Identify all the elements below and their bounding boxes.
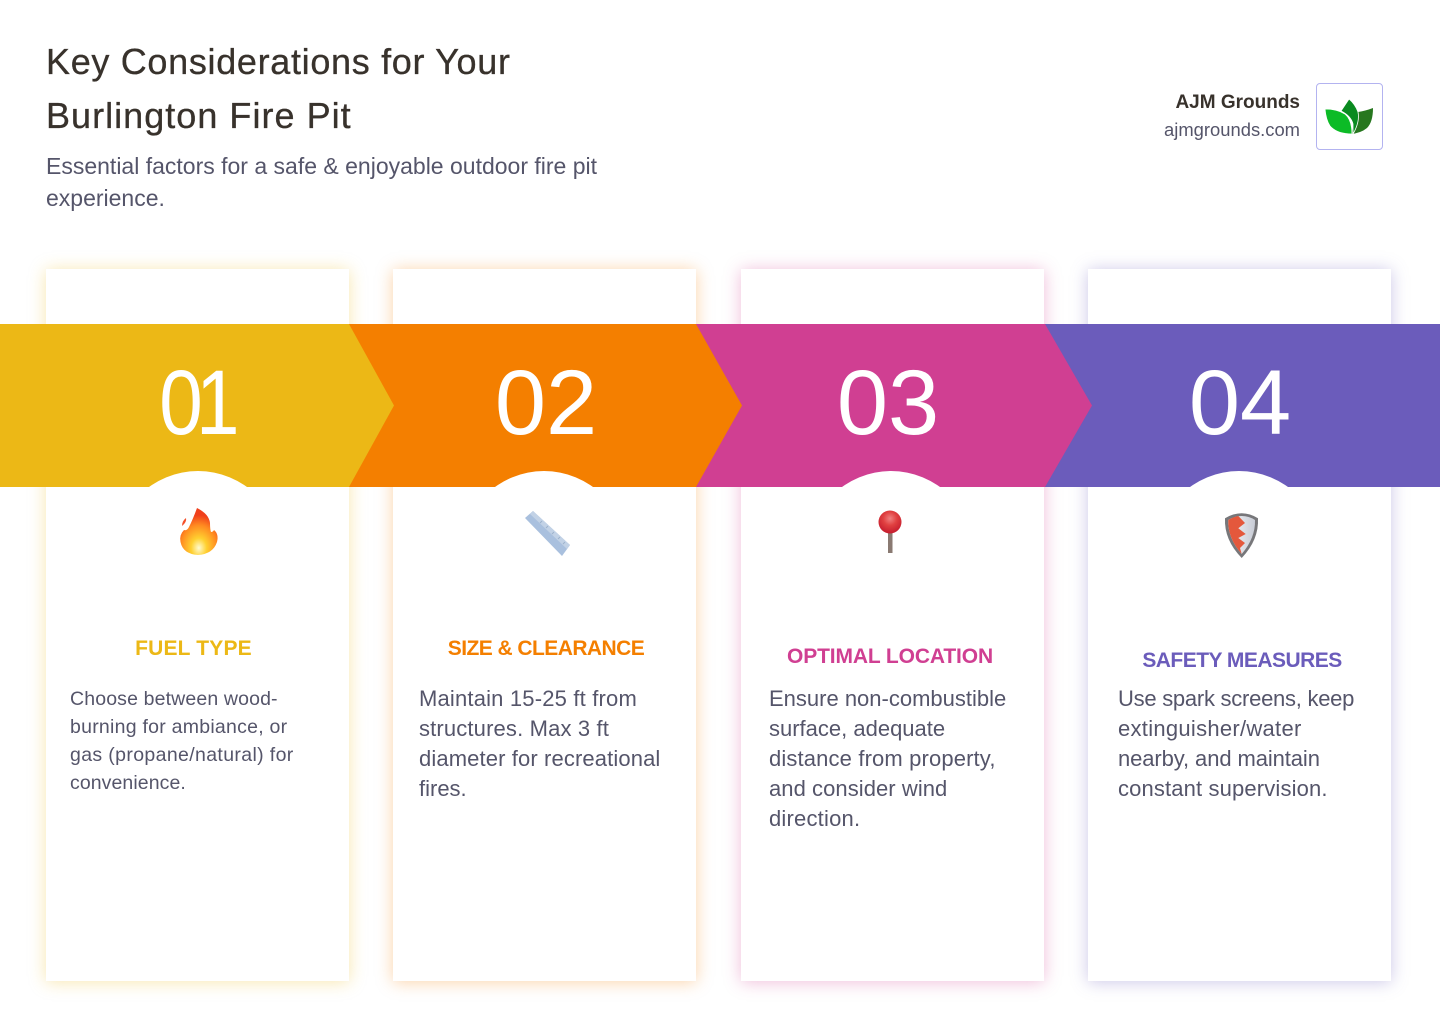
- text: fuel type: Choose between wood-: [70, 688, 278, 710]
- card 4: [1088, 269, 1391, 981]
- logo box: [1316, 83, 1383, 150]
- icon: pin: [878, 510, 902, 553]
- text: safety measures: extinguisher/water: [1118, 716, 1302, 741]
- text: optimal location: [769, 686, 1006, 831]
- text: size and clearance: structures. Max 3 ft: [419, 716, 609, 741]
- text: size and clearance: fires.: [419, 776, 467, 801]
- chevron band: [0, 324, 1440, 487]
- heading: fuel type: FUEL TYPE: [135, 637, 252, 660]
- text: optimal location: direction.: [769, 806, 860, 831]
- icon: leaves: [1326, 100, 1373, 134]
- card 1: [46, 269, 349, 981]
- chevron 3: [696, 324, 1092, 487]
- card 3: [741, 269, 1044, 981]
- title: Key Considerations for Your: [46, 41, 511, 82]
- icon: shield: [1225, 513, 1258, 558]
- brand name: AJM Grounds: [1175, 92, 1300, 113]
- chevron 2: [349, 324, 742, 487]
- text: fuel type: [70, 688, 294, 794]
- title: [46, 41, 511, 136]
- text: fuel type: gas (propane/natural) for: [70, 744, 294, 766]
- chevron 1: [0, 324, 394, 487]
- icon: fire: [180, 508, 218, 555]
- number 01: 01: [159, 352, 233, 454]
- heading: safety measures: SAFETY MEASURES: [1142, 649, 1342, 672]
- text: safety measures: Use spark screens, keep: [1118, 686, 1354, 711]
- number 04: 04: [1189, 352, 1291, 454]
- text: optimal location: distance from property,: [769, 746, 996, 771]
- text: safety measures: constant supervision.: [1118, 776, 1328, 801]
- subtitle: [46, 153, 597, 211]
- text: size and clearance: diameter for recreational: [419, 746, 660, 771]
- text: safety measures: nearby, and maintain: [1118, 746, 1320, 771]
- text: fuel type: burning for ambiance, or: [70, 716, 287, 738]
- chevron 4: [1045, 324, 1440, 487]
- heading: optimal location: OPTIMAL LOCATION: [787, 645, 993, 668]
- text: optimal location: surface, adequate: [769, 716, 945, 741]
- text: size and clearance: Maintain 15-25 ft from: [419, 686, 637, 711]
- text: optimal location: and consider wind: [769, 776, 947, 801]
- text: fuel type: convenience.: [70, 772, 186, 794]
- number 03: 03: [837, 352, 939, 454]
- text: safety measures: [1118, 686, 1354, 801]
- text: optimal location: Ensure non-combustible: [769, 686, 1006, 711]
- title: Burlington Fire Pit: [46, 95, 352, 136]
- subtitle: experience.: [46, 185, 165, 211]
- subtitle: Essential factors for a safe & enjoyable outdoor fire pit: [46, 153, 597, 179]
- card 2: [393, 269, 696, 981]
- icon tabs: [149, 471, 1288, 487]
- heading: size and clearance: SIZE & CLEARANCE: [448, 637, 644, 660]
- icon: ruler: [525, 511, 570, 556]
- number 02: 02: [495, 352, 597, 454]
- brand url: ajmgrounds.com: [1164, 119, 1300, 140]
- text: size and clearance: [419, 686, 660, 801]
